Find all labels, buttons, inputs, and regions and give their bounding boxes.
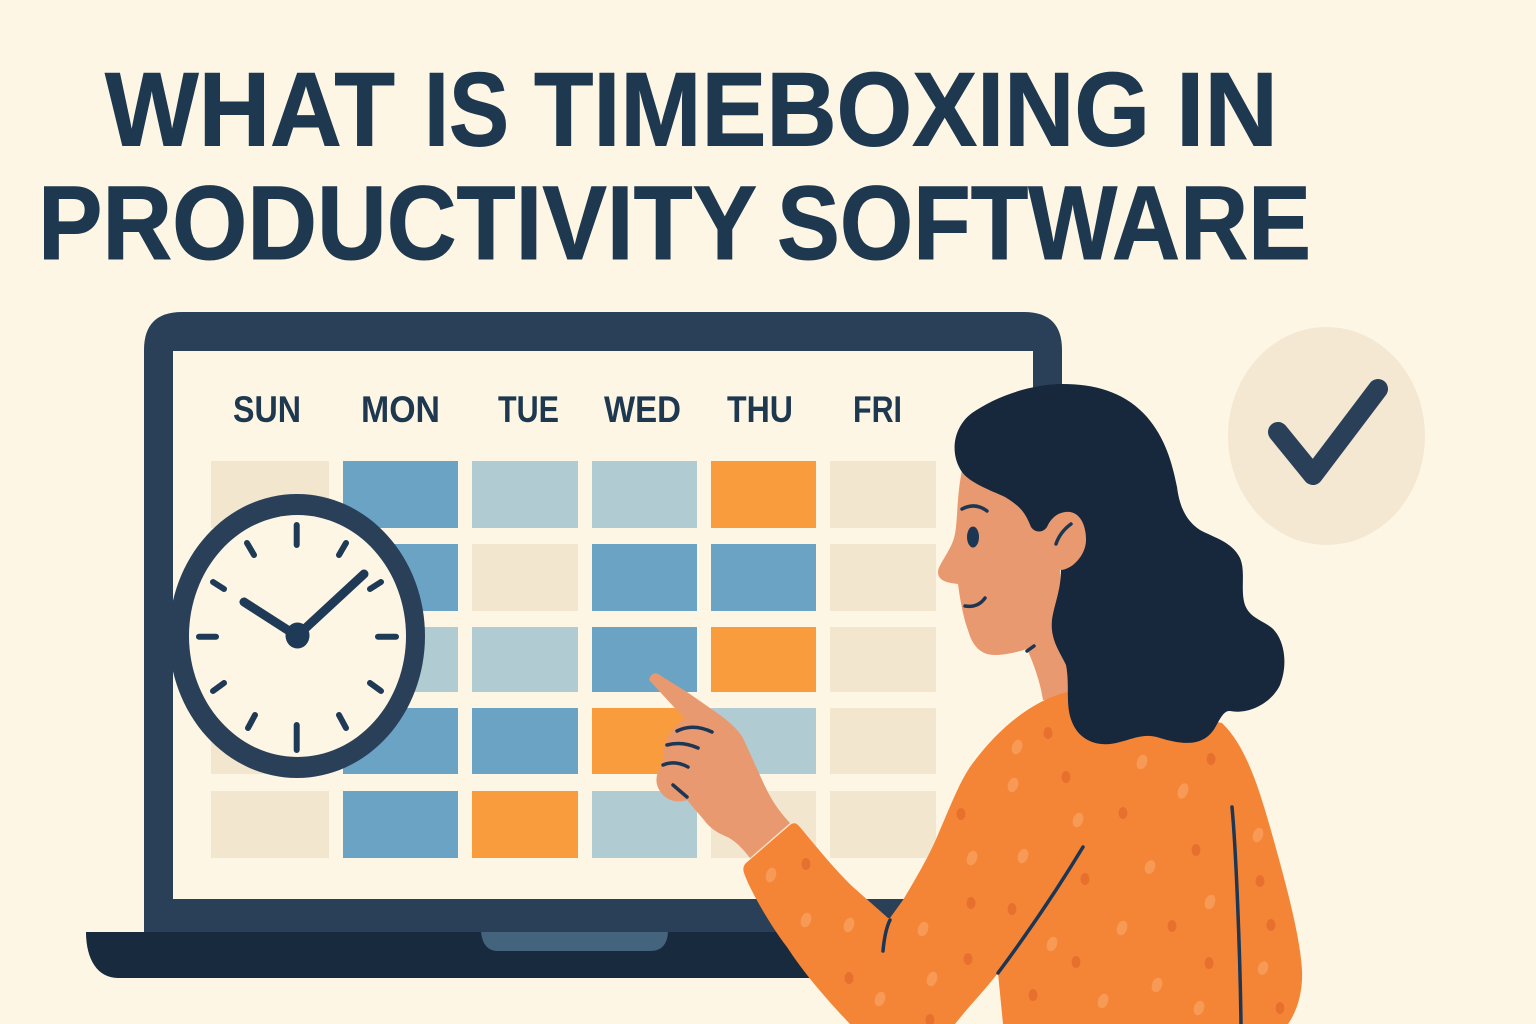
- weekday headers: FRI: [853, 389, 902, 430]
- title: TIMEBOXING: [534, 52, 1150, 168]
- weekday headers: THU: [727, 389, 793, 430]
- weekday headers: WED: [604, 389, 681, 430]
- facial features: [962, 506, 1071, 651]
- sweater light spots: [764, 738, 1270, 1017]
- title: PRODUCTIVITY: [38, 165, 757, 282]
- title: IS: [424, 52, 509, 168]
- icon: check mark badge: [1228, 327, 1425, 545]
- sweater dark spots: [802, 727, 1284, 1024]
- sweater: [743, 692, 1302, 1024]
- hand and forearm: [649, 673, 790, 858]
- laptop base: [86, 932, 900, 978]
- ear: [1045, 512, 1086, 570]
- face and neck: [938, 470, 1075, 705]
- hair: [955, 384, 1284, 744]
- calendar grid: [211, 461, 936, 858]
- weekday headers: MON: [361, 389, 440, 430]
- weekday headers: SUN: [233, 389, 301, 430]
- sweater fold lines: [883, 807, 1241, 1024]
- laptop notch: [481, 932, 668, 951]
- weekday headers: [233, 389, 902, 430]
- title: IN: [1176, 52, 1278, 168]
- person: [649, 384, 1302, 1024]
- icon: wall clock: [169, 494, 425, 778]
- finger lines: [663, 727, 712, 797]
- title: [38, 52, 1311, 282]
- laptop frame: [144, 312, 1062, 933]
- title: WHAT: [105, 52, 395, 168]
- laptop: [86, 312, 1062, 978]
- weekday headers: TUE: [498, 389, 559, 430]
- title: SOFTWARE: [777, 165, 1311, 282]
